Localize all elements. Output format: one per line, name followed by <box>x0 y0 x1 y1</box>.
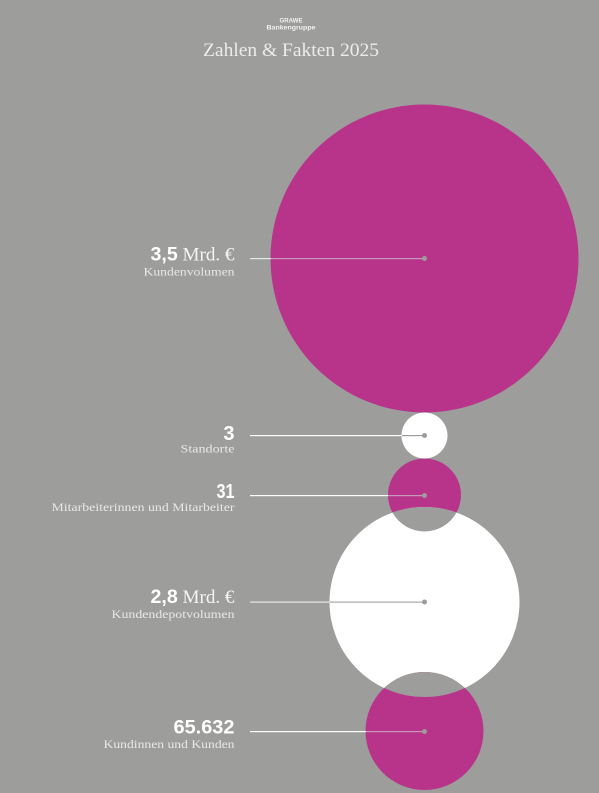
label: 31: 31 <box>216 481 234 503</box>
label text: Kundinnen und Kunden: Kundinnen und Kunden <box>104 739 235 751</box>
overlap: Mitarbeiter and depot <box>392 507 456 531</box>
label: 65.632: 65.632 <box>174 718 234 738</box>
brand name: Bankengruppe <box>266 24 316 32</box>
leader line: Standorte <box>250 433 427 438</box>
label text: Standorte: Standorte <box>180 444 234 456</box>
leader line: Kundendepotvolumen <box>250 600 427 604</box>
label: 2,8 Mrd. € <box>112 587 235 621</box>
label text: Kundendepotvolumen: Kundendepotvolumen <box>112 609 235 621</box>
circle: Kundenvolumen <box>270 104 578 412</box>
label: 2,8 Mrd. €: 2,8 Mrd. € <box>150 587 234 608</box>
circle: Standorte <box>402 412 448 458</box>
label: 3,5 Mrd. € <box>144 244 235 278</box>
leader line: Mitarbeiter <box>250 493 427 498</box>
leader line: Kundenvolumen <box>250 256 427 261</box>
label text: Kundenvolumen: Kundenvolumen <box>144 266 235 278</box>
label: 65.632 <box>104 718 235 751</box>
brand name <box>266 18 316 32</box>
label: 3,5 Mrd. €: 3,5 Mrd. € <box>150 244 234 266</box>
overlap: depot and customers <box>384 672 465 697</box>
circle: Mitarbeiter, white depot circle and customers with grey overlaps <box>330 458 520 790</box>
circle: Mitarbeiterinnen und Mitarbeiter <box>388 458 461 532</box>
title: Zahlen & Fakten 2025 <box>203 41 379 61</box>
circle: Kundendepotvolumen <box>330 507 520 697</box>
label text: Mitarbeiterinnen und Mitarbeiter: Mitarbeiterinnen und Mitarbeiter <box>52 502 235 514</box>
leader line: Kundinnen und Kunden <box>250 729 427 734</box>
label: 31 <box>52 481 235 514</box>
header <box>203 18 379 61</box>
label: 3 <box>180 423 234 456</box>
brand name: GRAWE <box>280 18 302 24</box>
label: 3: 3 <box>223 423 234 445</box>
circle: Kundinnen und Kunden <box>366 672 484 790</box>
